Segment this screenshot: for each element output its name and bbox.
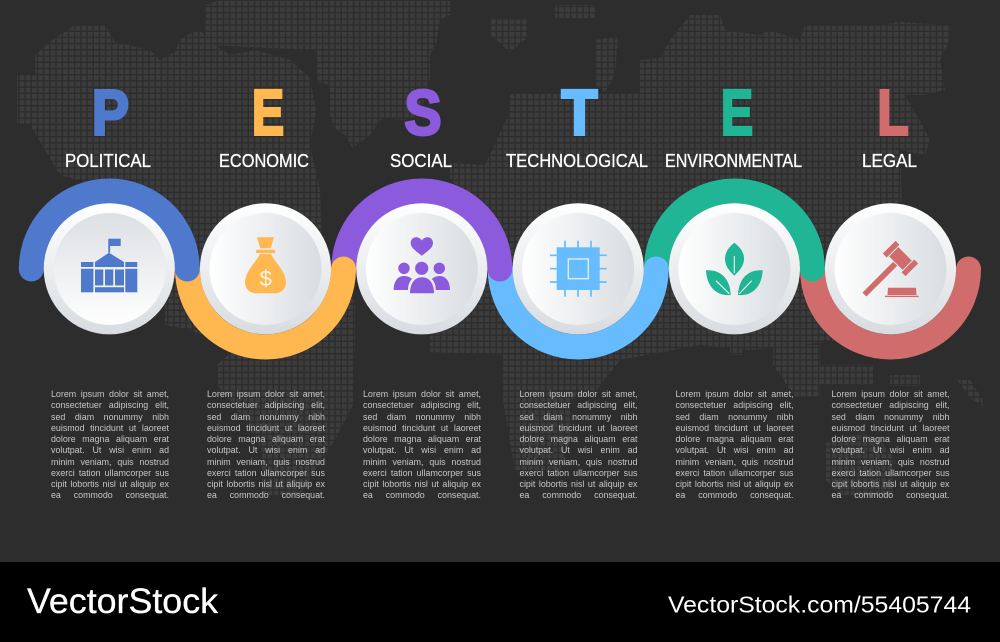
heading letters: P — [92, 77, 129, 148]
text block: economic: consectetuer adipiscing elit, — [207, 400, 325, 410]
text block: social — [363, 389, 481, 500]
text block: legal: volutpat. Ut wisi enim ad — [832, 445, 950, 455]
text block: legal — [832, 389, 950, 500]
arc: political — [31, 191, 187, 269]
category labels: ECONOMIC — [219, 150, 309, 171]
icon: gavel — [853, 241, 919, 306]
text block: social: exerci tation ullamcorper sus — [363, 468, 481, 478]
text block: social: ea commodo consequat. — [363, 490, 481, 500]
icon: people with heart — [394, 237, 450, 293]
dotted world map background — [17, 0, 983, 495]
footer logo: VectorStock — [27, 582, 219, 621]
text block: economic: exerci tation ullamcorper sus — [207, 468, 325, 478]
text block: technological: sed diam nonummy nibh — [520, 412, 638, 422]
circle: political — [44, 203, 175, 334]
circle: social — [356, 203, 487, 334]
category labels: SOCIAL — [390, 150, 452, 171]
text block: legal: Lorem ipsum dolor sit amet, — [832, 389, 950, 399]
text block: economic: Lorem ipsum dolor sit amet, — [207, 389, 325, 399]
text block: economic: volutpat. Ut wisi enim ad — [207, 445, 325, 455]
arc: economic — [188, 269, 344, 347]
text block: legal: minim veniam, quis nostrud — [832, 457, 950, 467]
arc: technological — [500, 269, 656, 347]
text block: social: consectetuer adipiscing elit, — [363, 400, 481, 410]
text block: political: volutpat. Ut wisi enim ad — [51, 445, 169, 455]
text block: political: euismod tincidunt ut laoreet — [51, 423, 169, 433]
text block: environmental: volutpat. Ut wisi enim ad — [676, 445, 794, 455]
category labels: POLITICAL — [65, 150, 151, 171]
text block: economic: sed diam nonummy nibh — [207, 412, 325, 422]
text block: economic: cipit lobortis nisl ut aliquip ex — [207, 479, 325, 489]
text block: legal: ea commodo consequat. — [832, 490, 950, 500]
text block: economic: euismod tincidunt ut laoreet — [207, 423, 325, 433]
text block: social: volutpat. Ut wisi enim ad — [363, 445, 481, 455]
text block: economic: minim veniam, quis nostrud — [207, 457, 325, 467]
category labels: LEGAL — [862, 150, 917, 171]
text block: environmental: Lorem ipsum dolor sit amet, — [676, 389, 794, 399]
footer bar — [0, 562, 1000, 642]
text block: social: cipit lobortis nisl ut aliquip ex — [363, 479, 481, 489]
text block: legal: dolore magna aliquam erat — [832, 434, 950, 444]
arc: social — [344, 191, 500, 269]
text block: technological: Lorem ipsum dolor sit amet, — [520, 389, 638, 399]
icon: money bag: $ — [260, 266, 272, 291]
text block: social: dolore magna aliquam erat — [363, 434, 481, 444]
text block: social: sed diam nonummy nibh — [363, 412, 481, 422]
text block: political — [51, 389, 169, 500]
text block: environmental: ea commodo consequat. — [676, 490, 794, 500]
text block: legal: sed diam nonummy nibh — [832, 412, 950, 422]
connected arcs ribbon — [31, 191, 969, 347]
category labels: ENVIRONMENTAL — [665, 150, 802, 171]
heading letters: E — [252, 77, 284, 148]
category labels: TECHNOLOGICAL — [506, 150, 648, 171]
text block: environmental: euismod tincidunt ut laoreet — [676, 423, 794, 433]
text block: environmental: minim veniam, quis nostrud — [676, 457, 794, 467]
text block: political: minim veniam, quis nostrud — [51, 457, 169, 467]
text block: environmental: dolore magna aliquam erat — [676, 434, 794, 444]
text block: political: Lorem ipsum dolor sit amet, — [51, 389, 169, 399]
text block: social: euismod tincidunt ut laoreet — [363, 423, 481, 433]
text block: environmental: exerci tation ullamcorper sus — [676, 468, 794, 478]
circle: economic — [200, 203, 331, 334]
circle: legal — [825, 203, 956, 334]
text block: legal: cipit lobortis nisl ut aliquip ex — [832, 479, 950, 489]
text block: technological: exerci tation ullamcorper sus — [520, 468, 638, 478]
text block: legal: consectetuer adipiscing elit, — [832, 400, 950, 410]
text block: political: cipit lobortis nisl ut aliquip ex — [51, 479, 169, 489]
text block: political: exerci tation ullamcorper sus — [51, 468, 169, 478]
text block: economic — [207, 389, 325, 500]
heading letters: T — [562, 77, 597, 149]
icon: leaves — [706, 243, 763, 295]
text block: technological: consectetuer adipiscing elit, — [520, 400, 638, 410]
icon: microchip — [550, 241, 607, 297]
text block: technological: cipit lobortis nisl ut aliquip ex — [520, 479, 638, 489]
text block: social: Lorem ipsum dolor sit amet, — [363, 389, 481, 399]
circle: environmental — [669, 203, 800, 334]
text block: economic: ea commodo consequat. — [207, 490, 325, 500]
text block: social: minim veniam, quis nostrud — [363, 457, 481, 467]
text block: technological: dolore magna aliquam erat — [520, 434, 638, 444]
text block: technological — [520, 389, 638, 500]
heading letters: S — [404, 77, 442, 148]
text block: environmental: sed diam nonummy nibh — [676, 412, 794, 422]
text block: political: sed diam nonummy nibh — [51, 412, 169, 422]
text block: technological: euismod tincidunt ut laoreet — [520, 423, 638, 433]
heading letters: L — [877, 78, 909, 149]
heading letters: E — [721, 77, 753, 148]
text block: legal: exerci tation ullamcorper sus — [832, 468, 950, 478]
text block: technological: minim veniam, quis nostrud — [520, 457, 638, 467]
text block: environmental — [676, 389, 794, 500]
text block: economic: dolore magna aliquam erat — [207, 434, 325, 444]
text block: political: dolore magna aliquam erat — [51, 434, 169, 444]
text block: political: consectetuer adipiscing elit, — [51, 400, 169, 410]
icon: government building — [81, 239, 137, 292]
arc: environmental — [656, 191, 812, 269]
text block: technological: volutpat. Ut wisi enim ad — [520, 445, 638, 455]
arc: legal — [812, 269, 968, 347]
text block: political: ea commodo consequat. — [51, 490, 169, 500]
heading letters — [92, 77, 909, 149]
text block: legal: euismod tincidunt ut laoreet — [832, 423, 950, 433]
footer url: VectorStock.com/55405744 — [668, 592, 971, 618]
text block: environmental: cipit lobortis nisl ut aliquip ex — [676, 479, 794, 489]
text block: technological: ea commodo consequat. — [520, 490, 638, 500]
category labels — [65, 150, 917, 171]
text block: environmental: consectetuer adipiscing elit, — [676, 400, 794, 410]
circle: technological — [513, 203, 644, 334]
